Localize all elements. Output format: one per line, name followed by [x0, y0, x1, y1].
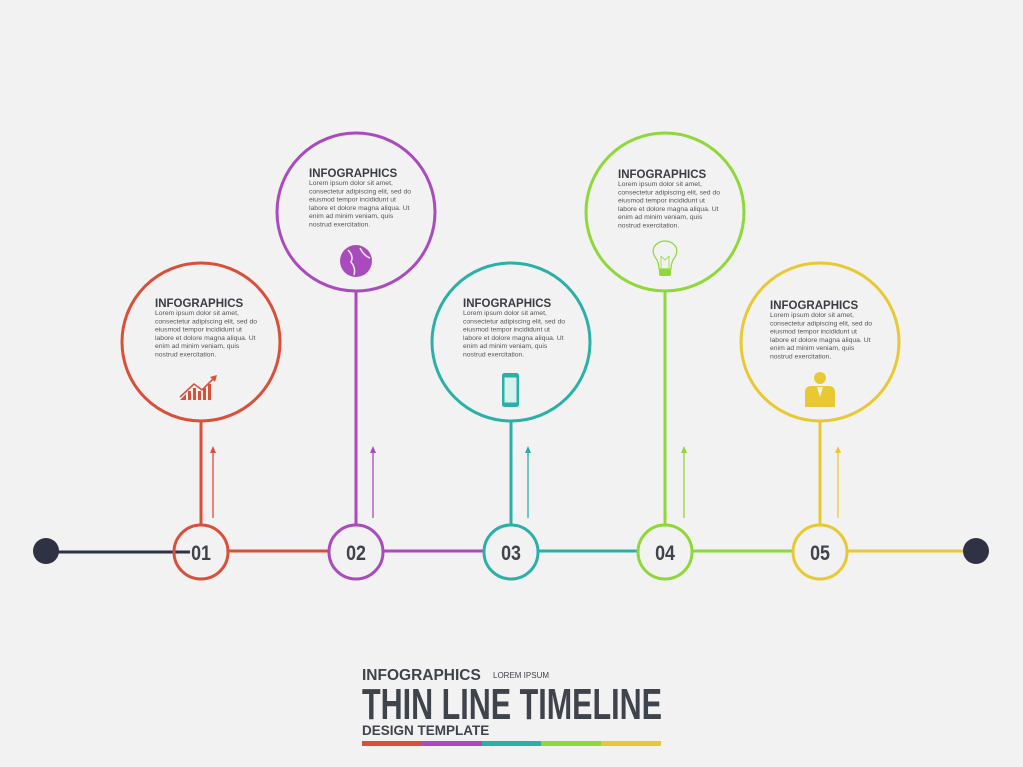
icon: chart — [180, 375, 217, 400]
text 3: labore et dolore magna aliqua. Ut — [463, 335, 564, 342]
step 1: 01 — [191, 542, 211, 565]
title block: INFOGRAPHICS — [362, 667, 481, 684]
text 3: enim ad minim veniam, quis — [463, 343, 548, 350]
text 5: Lorem ipsum dolor sit amet, — [770, 312, 854, 319]
text 5: consectetur adipiscing elit, sed do — [770, 320, 872, 327]
text 3 — [463, 298, 565, 358]
text 1 — [155, 298, 257, 358]
start dot — [33, 538, 59, 564]
step 2 — [277, 133, 435, 579]
text 2: nostrud exercitation. — [309, 222, 370, 228]
text 4: eiusmod tempor incididunt ut — [618, 198, 705, 205]
text 2 — [309, 168, 411, 228]
text 5: INFOGRAPHICS — [770, 300, 858, 312]
step 3: 03 — [501, 542, 521, 565]
text 3: eiusmod tempor incididunt ut — [463, 327, 550, 334]
text 4: labore et dolore magna aliqua. Ut — [618, 206, 719, 213]
text 4 — [618, 169, 720, 230]
text 1: enim ad minim veniam, quis — [155, 343, 240, 350]
title block — [362, 667, 662, 738]
step 3 — [432, 263, 590, 579]
text 5: eiusmod tempor incididunt ut — [770, 329, 857, 336]
text 3: consectetur adipiscing elit, sed do — [463, 318, 565, 325]
arrow 3 — [525, 446, 531, 518]
text 1: eiusmod tempor incididunt ut — [155, 327, 242, 334]
step 4: 04 — [655, 542, 675, 565]
text 2: eiusmod tempor incididunt ut — [309, 197, 396, 204]
icon: globe — [340, 245, 372, 277]
step 4 — [586, 133, 744, 579]
text 1: Lorem ipsum dolor sit amet, — [155, 310, 239, 317]
text 2: Lorem ipsum dolor sit amet, — [309, 180, 393, 187]
text 4: nostrud exercitation. — [618, 222, 679, 230]
text 4: consectetur adipiscing elit, sed do — [618, 189, 720, 196]
arrow 4 — [681, 446, 687, 518]
text 5: labore et dolore magna aliqua. Ut — [770, 337, 871, 344]
step 5: 05 — [810, 542, 830, 565]
timeline line — [46, 551, 976, 552]
title block: DESIGN TEMPLATE — [362, 723, 489, 738]
text 2: labore et dolore magna aliqua. Ut — [309, 205, 410, 212]
arrow 5 — [835, 446, 841, 518]
text 5: nostrud exercitation. — [770, 354, 831, 360]
text 2: enim ad minim veniam, quis — [309, 213, 394, 220]
icon: bulb — [653, 241, 677, 276]
step 1 — [122, 263, 280, 579]
text 5: enim ad minim veniam, quis — [770, 345, 855, 352]
text 3: nostrud exercitation. — [463, 352, 524, 358]
arrow 2 — [370, 446, 376, 518]
icon: phone — [502, 373, 519, 407]
title block: LOREM IPSUM — [493, 671, 549, 680]
text 5 — [770, 300, 872, 360]
end dot — [963, 538, 989, 564]
arrow 1 — [210, 446, 216, 518]
title block: THIN LINE TIMELINE — [362, 680, 662, 729]
text 3: INFOGRAPHICS — [463, 298, 552, 310]
icon: person — [805, 372, 835, 407]
text 2: INFOGRAPHICS — [309, 168, 398, 180]
text 1: INFOGRAPHICS — [155, 298, 244, 310]
text 1: labore et dolore magna aliqua. Ut — [155, 335, 256, 342]
step 2: 02 — [346, 542, 366, 565]
text 2: consectetur adipiscing elit, sed do — [309, 188, 411, 195]
text 3: Lorem ipsum dolor sit amet, — [463, 310, 547, 317]
text 1: consectetur adipiscing elit, sed do — [155, 318, 257, 325]
text 4: enim ad minim veniam, quis — [618, 214, 703, 221]
text 4: INFOGRAPHICS — [618, 169, 706, 181]
text 1: nostrud exercitation. — [155, 352, 216, 358]
text 4: Lorem ipsum dolor sit amet, — [618, 181, 702, 188]
color bar — [362, 741, 661, 746]
step 5 — [741, 263, 899, 579]
